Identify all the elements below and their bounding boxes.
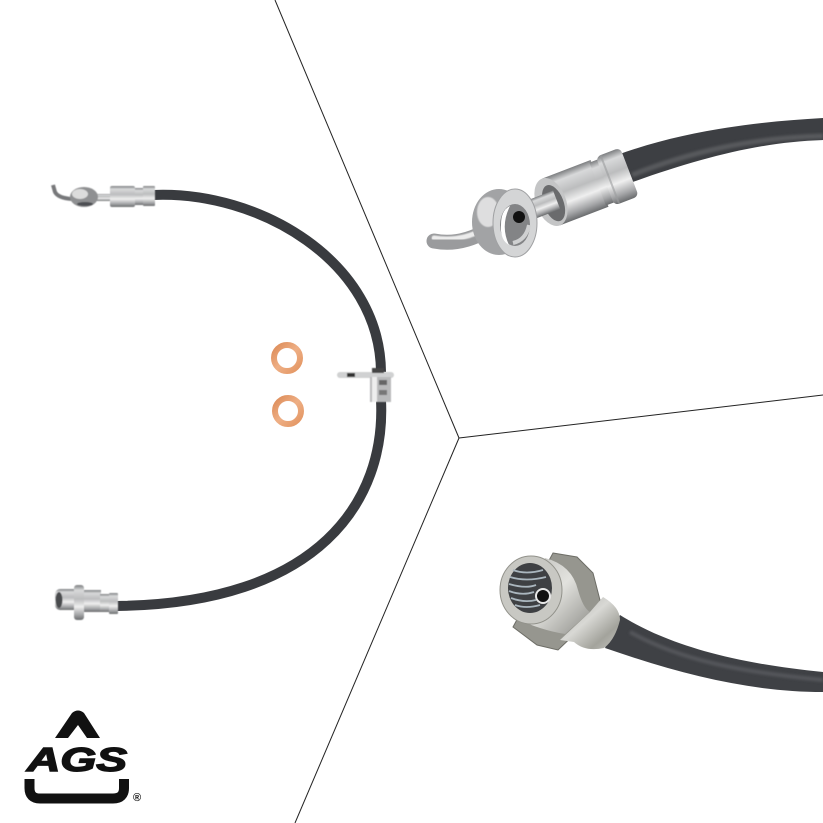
logo: registered mark: ® <box>133 792 141 804</box>
logo: top chevron <box>55 710 100 738</box>
hex flange <box>513 553 602 650</box>
detail: threaded end close-up <box>500 553 823 692</box>
upper banjo fitting <box>53 185 155 207</box>
divider line: upper left <box>275 0 459 438</box>
hose: upper section <box>152 195 381 372</box>
threaded-end face <box>500 556 562 624</box>
threaded-end body <box>515 558 590 634</box>
close-up sleeve and collar <box>514 148 639 237</box>
close-up hose <box>617 118 823 183</box>
hose: lower section <box>116 400 381 606</box>
lower fitting <box>55 585 118 620</box>
threaded-end collar <box>560 597 620 649</box>
copper washer: top <box>274 345 300 371</box>
copper washer: bottom <box>275 398 301 424</box>
AGS logo <box>26 710 141 804</box>
detail: banjo fitting close-up <box>434 118 823 257</box>
mounting bracket <box>337 368 394 402</box>
logo: bottom tray <box>30 779 124 798</box>
full brake hose assembly <box>53 185 394 620</box>
divider line: lower left <box>295 438 459 823</box>
close-up banjo ring <box>472 189 537 257</box>
divider line: right <box>459 395 823 438</box>
logo: AGS wordmark: AGS <box>26 741 127 778</box>
threaded-end hose <box>605 615 823 692</box>
close-up hook tube <box>434 230 486 242</box>
